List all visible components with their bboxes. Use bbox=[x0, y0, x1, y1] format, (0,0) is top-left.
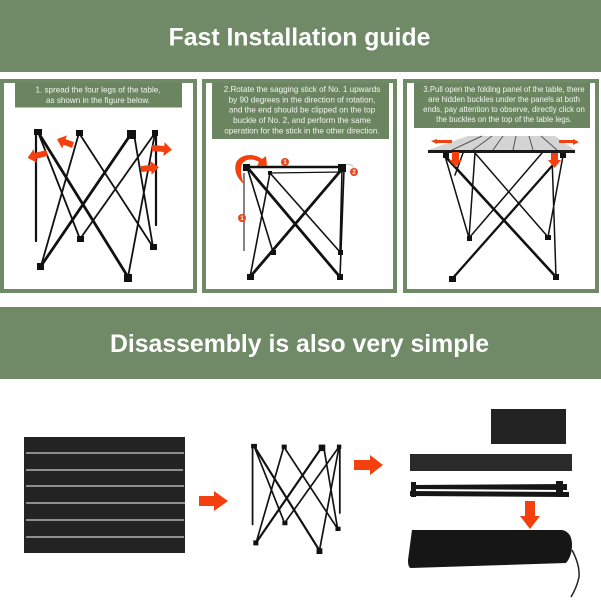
rolled table top bbox=[491, 409, 566, 444]
step 2 instruction text bbox=[212, 83, 389, 139]
step 2 instruction text: operation for the stick in the other direction. bbox=[224, 126, 380, 136]
folded frame bbox=[410, 481, 569, 497]
step 3 instruction text: 3.Pull open the folding panel of the table, there bbox=[423, 85, 585, 94]
heading band: Fast Installation guide bbox=[0, 0, 601, 72]
step 3 instruction text: are hidden buckles under the panels at both bbox=[428, 95, 580, 104]
step 3 instruction text: the buckles on the top of the table legs. bbox=[436, 115, 572, 124]
step 3 instruction text: ends, pay attention to observe, directly click on bbox=[423, 105, 585, 114]
folding table legs with locking stick bbox=[243, 164, 346, 280]
folding table legs, spread bbox=[34, 129, 158, 282]
folding frame bbox=[251, 444, 341, 554]
heading band: Disassembly bbox=[0, 307, 601, 379]
step 1 instruction text: 1. spread the four legs of the table, bbox=[35, 86, 161, 94]
heading band: Fast Installation guide: Fast Installation guide bbox=[169, 24, 430, 52]
red arrows: spread outward bbox=[26, 133, 173, 176]
step 2 instruction text: 2.Rotate the sagging stick of No. 1 upwards bbox=[224, 85, 380, 94]
curved rotation arrow bbox=[235, 155, 267, 184]
step 2 instruction text: and the end should be clipped on the top bbox=[229, 106, 376, 114]
arrow: to packed parts bbox=[354, 455, 383, 475]
storage bag with drawcord bbox=[408, 530, 579, 597]
panel: step 2 bbox=[204, 81, 395, 291]
step 2 instruction text: by 90 degrees in the direction of rotation, bbox=[229, 96, 375, 104]
number badges: 1 bbox=[283, 160, 287, 166]
unfolded table bbox=[428, 136, 575, 282]
folded slat bundle bbox=[410, 454, 572, 471]
step 1 instruction text: as shown in the figure below. bbox=[46, 96, 150, 105]
arrow: to frame bbox=[199, 491, 228, 511]
step 2 instruction text: buckle of No. 2, and perform the same bbox=[233, 116, 371, 125]
number badges: 2 bbox=[352, 170, 356, 176]
red arrows: panel and buckles bbox=[431, 139, 579, 168]
step 1 instruction text bbox=[15, 83, 182, 108]
arrow: into bag bbox=[520, 501, 540, 529]
step 3 instruction text bbox=[414, 83, 590, 128]
table top panel, black slats bbox=[24, 437, 185, 553]
heading band: Disassembly: Disassembly is also very simple bbox=[110, 331, 489, 358]
panel: step 1 bbox=[2, 81, 195, 291]
number badges bbox=[238, 158, 358, 222]
panel: step 3 bbox=[405, 81, 597, 291]
number badges: 1 bbox=[240, 216, 244, 222]
